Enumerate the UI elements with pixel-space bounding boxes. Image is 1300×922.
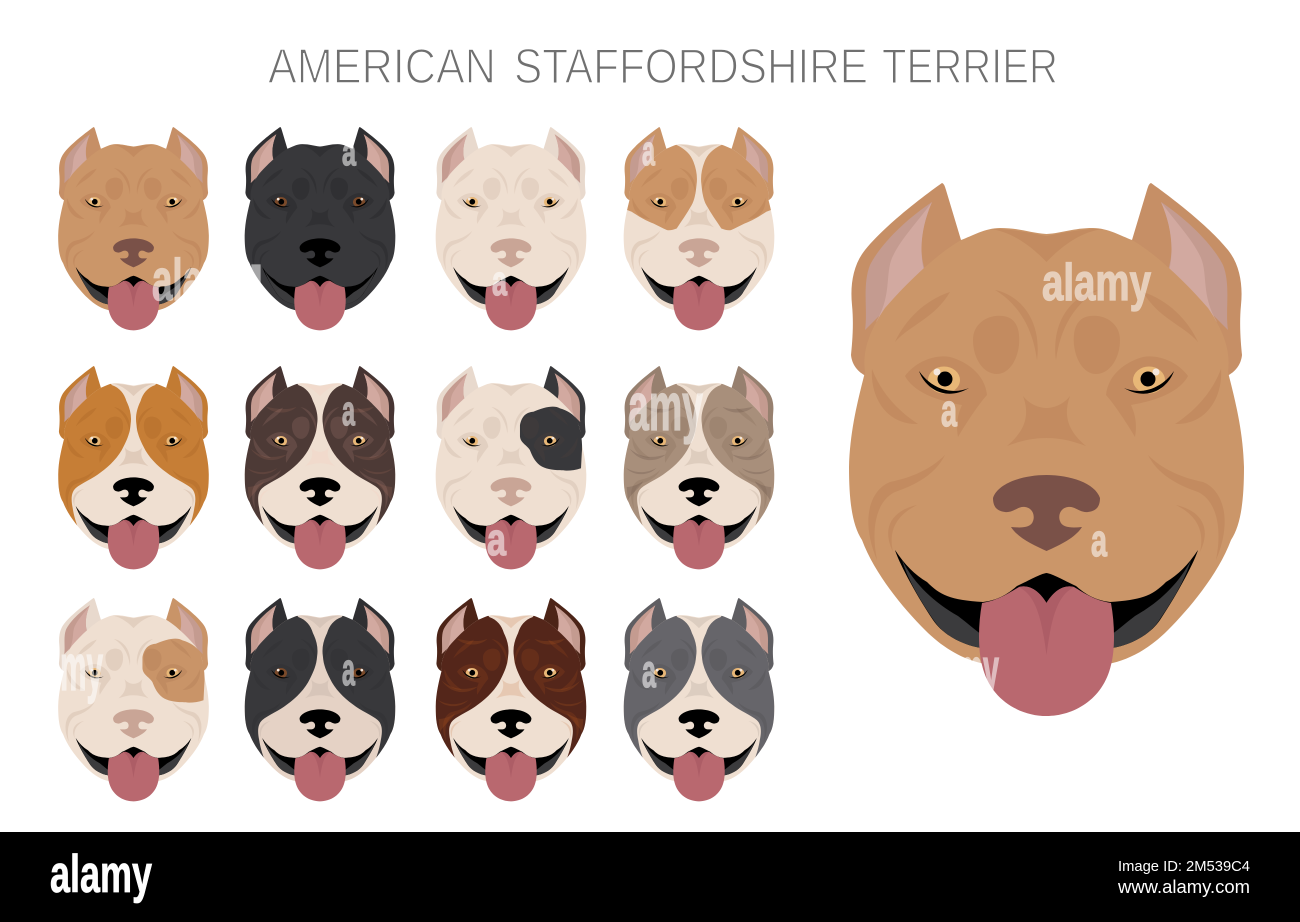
large dog portrait — [849, 183, 1244, 716]
image watermarks: a — [487, 514, 507, 565]
title: AMERICAN — [268, 40, 496, 94]
dog 5: orange with white blaze — [58, 366, 209, 570]
image watermarks: a — [642, 127, 655, 174]
image watermarks: ala — [152, 248, 203, 313]
large dog facial creases — [868, 229, 1225, 560]
image watermarks: a — [342, 387, 355, 434]
dog 7: cream with black eye patch — [436, 366, 586, 569]
image watermarks: a — [492, 257, 507, 304]
large dog tongue — [979, 586, 1114, 716]
large dog ears — [851, 183, 1242, 376]
dog 9: cream with tan eye patch — [58, 598, 209, 801]
dog 10: black with white blaze — [244, 598, 396, 802]
dog 8: taupe brindle with white blaze — [624, 366, 774, 570]
footer logo: alamy — [50, 845, 152, 904]
image watermarks: a — [642, 645, 656, 697]
image watermarks: a — [342, 644, 356, 695]
large dog mouth — [895, 550, 1198, 648]
dog 6: dark brown brindle with white blaze — [244, 366, 396, 570]
image watermarks: my — [957, 636, 999, 703]
large dog nose — [993, 475, 1100, 551]
large dog eyes — [919, 366, 1174, 394]
dog 11: chestnut brindle with white blaze — [436, 598, 586, 802]
title: STAFFORDSHIRE — [514, 40, 868, 94]
image watermarks: a — [1091, 515, 1108, 566]
image watermarks: alamy — [1042, 254, 1151, 312]
title: TERRIER — [882, 40, 1058, 94]
dog 3: solid cream — [436, 127, 586, 330]
image watermarks: a — [941, 385, 958, 436]
image watermarks: amy — [628, 369, 703, 445]
dog 1: solid tan — [58, 127, 209, 330]
image watermarks — [60, 127, 1151, 704]
large dog head — [849, 228, 1244, 680]
image id: Image ID: 2M539C4 — [1118, 858, 1250, 875]
image watermarks: my — [60, 630, 103, 704]
dog 2: solid black — [245, 127, 395, 330]
title — [268, 40, 1058, 94]
website: www.alamy.com — [1117, 877, 1250, 897]
image watermarks: a — [342, 132, 357, 174]
dog 12: grey with white blaze — [624, 598, 774, 802]
footer bar — [0, 832, 1300, 922]
dog 4: cream with tan eye patches — [616, 127, 782, 330]
